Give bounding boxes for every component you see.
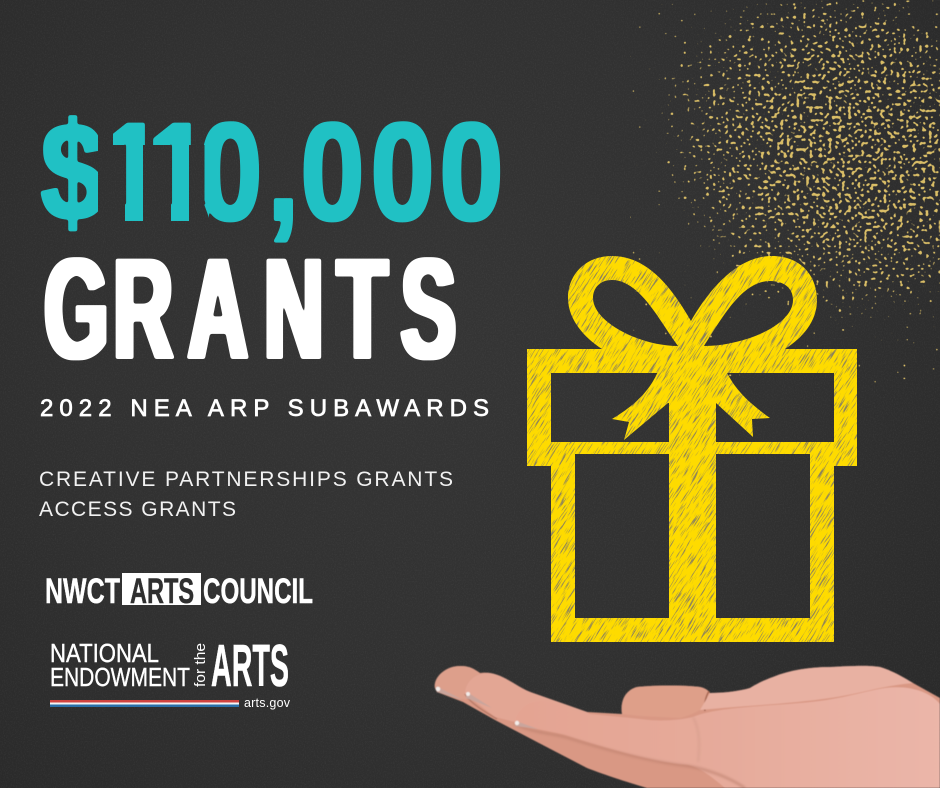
finger creases: [515, 724, 745, 788]
infographic canvas: ARTS: [211, 633, 289, 699]
thumb: [622, 686, 710, 718]
flag stripe: [50, 700, 239, 702]
grants heading: GRANTS: [44, 228, 456, 389]
icon: yellow chalk gift box: [527, 256, 857, 642]
arts.gov: arts.gov: [244, 696, 291, 710]
arts box: [122, 573, 201, 605]
grant types list: [39, 468, 453, 521]
logo: National Endowment for the Arts: NATIONAL: [50, 638, 159, 668]
logo: National Endowment for the Arts: ENDOWMENT: [50, 662, 190, 692]
index finger and palm: [515, 687, 940, 788]
thumb base: [700, 666, 913, 710]
fingernails: [436, 686, 463, 700]
creative partnerships grants: CREATIVE PARTNERSHIPS GRANTS: [39, 468, 453, 491]
silhouette and lower fingers: [435, 666, 940, 788]
amount heading: $110,000: [41, 94, 503, 251]
access grants: ACCESS GRANTS: [39, 498, 236, 521]
gold glitter spray: [630, 0, 940, 390]
subtitle: 2022 NEA ARP SUBAWARDS: [40, 395, 489, 422]
logo: National Endowment for the Arts: [50, 633, 291, 710]
logo: NWCT Arts Council: NWCT: [45, 572, 120, 611]
logo: NWCT Arts Council: ARTS: [130, 572, 194, 611]
for the: for the: [192, 643, 209, 687]
ring finger: [465, 673, 600, 722]
logo: NWCT Arts Council: COUNCIL: [203, 572, 313, 611]
little finger: [435, 666, 480, 700]
icon: open hand: [435, 666, 940, 788]
logo: NWCT Arts Council: [45, 572, 313, 611]
